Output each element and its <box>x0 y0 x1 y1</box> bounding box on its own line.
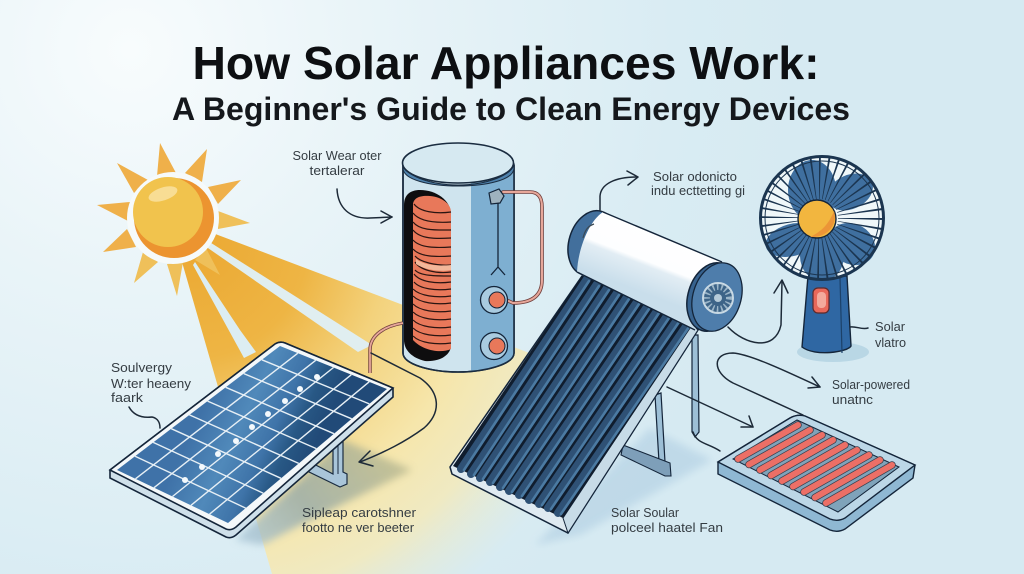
label: fan <box>875 320 906 350</box>
arrow: cylinder to fan <box>728 280 788 343</box>
tank cutaway with coil <box>404 190 451 361</box>
title: A Beginner's Guide to Clean Energy Devices <box>172 91 850 127</box>
label: solar panel: W:ter heaeny <box>111 377 192 391</box>
arrow: collector to label <box>600 171 638 210</box>
cable: collector stand to heater <box>693 432 720 451</box>
label: collector: indu ecttetting gi <box>651 184 745 198</box>
gauges and pipe <box>502 192 542 303</box>
label: heater: Solar-powered <box>832 378 910 392</box>
heat pipe from panel to tank <box>370 323 403 373</box>
label: fan: vlatro <box>875 336 906 350</box>
label: water tank: Solar Wear oter <box>292 149 382 163</box>
label: heater <box>832 378 910 407</box>
fan shadow <box>797 342 869 362</box>
label: collector stand: polceel haatel Fan <box>611 521 723 535</box>
tank body <box>403 165 514 372</box>
label: solar panel: faark <box>111 391 144 405</box>
solar panel <box>110 342 393 538</box>
label: panel stand <box>302 506 416 535</box>
label: collector stand: Solar Soular <box>611 506 679 520</box>
label: solar panel <box>111 361 192 405</box>
tank lid <box>403 163 514 186</box>
label: solar panel: Soulvergy <box>111 361 173 375</box>
label: panel stand: Sipleap carotshner <box>302 506 416 520</box>
label: collector: Solar odonicto <box>653 170 737 184</box>
fan button <box>813 288 829 313</box>
heater rods <box>738 425 892 503</box>
label: fan: Solar <box>875 320 905 334</box>
fan guard and blades <box>760 156 884 280</box>
arrow: tank label <box>337 189 392 223</box>
panel stand <box>305 430 347 487</box>
label: panel stand: footto ne ver beeter <box>302 521 414 535</box>
arrow: tank to panel stand <box>359 353 436 466</box>
arrow: panel label <box>129 407 160 428</box>
label: heater: unatnc <box>832 393 873 407</box>
icon: solar heater <box>718 415 915 531</box>
label: water tank <box>292 149 382 178</box>
title <box>172 37 850 127</box>
cylinder end cap <box>679 257 745 337</box>
collector stands <box>621 335 699 476</box>
panel frame <box>110 342 393 538</box>
sun beams <box>182 232 640 574</box>
panel cells <box>117 346 387 523</box>
icon: solar fan <box>760 156 884 362</box>
panel shadow <box>235 440 412 545</box>
icon: sun <box>97 143 250 296</box>
fan wheel <box>703 283 733 313</box>
solar water heater collector <box>450 205 750 533</box>
collector shadow <box>535 428 712 545</box>
title: How Solar Appliances Work: <box>192 37 820 89</box>
connector: fan label <box>850 327 868 329</box>
collector frame <box>450 276 698 533</box>
label: water tank: tertalerar <box>310 164 364 178</box>
heater body <box>718 415 915 531</box>
arrow: collector to heater <box>667 387 753 427</box>
arrow: loop to solar-powered label <box>717 353 820 415</box>
storage cylinder <box>560 205 624 281</box>
collector tubes <box>453 276 692 518</box>
label: collector stand <box>611 506 723 535</box>
label: collector <box>651 170 745 198</box>
heater tray <box>733 420 899 512</box>
fan hub <box>798 200 836 238</box>
water tank <box>402 143 542 372</box>
fan base <box>802 276 851 353</box>
